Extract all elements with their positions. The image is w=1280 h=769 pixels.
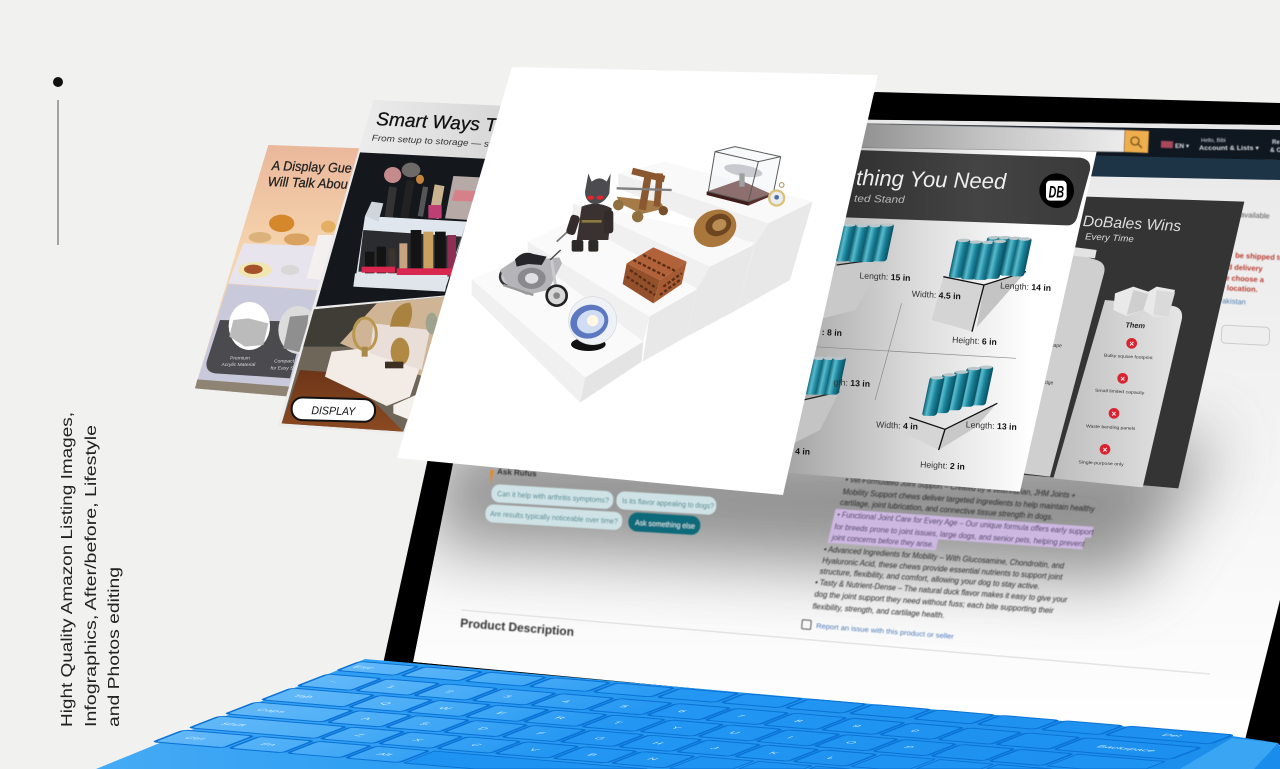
availability notes: d delivery (1227, 262, 1264, 273)
home row (225, 702, 877, 766)
heading: Smart Ways T (376, 108, 499, 135)
table with food (228, 215, 336, 290)
heading (1082, 213, 1182, 244)
brand badge: DB (1049, 182, 1064, 201)
item: armored knight figure (557, 173, 613, 252)
dark panel (1007, 196, 1244, 488)
availability notes: ery location. (1213, 283, 1258, 294)
ask rufus chips: Ask something else (635, 518, 695, 531)
availability notes: se choose a (1221, 273, 1265, 284)
them column (1053, 287, 1182, 487)
us product column: hape (1051, 343, 1062, 349)
lifestyle backdrop (195, 145, 363, 397)
card: DoBales Wins comparison (993, 196, 1244, 488)
lipsticks (365, 230, 456, 277)
vertical caption: Hight Quality Amazon Listing Images, (59, 412, 76, 727)
function and number rows (297, 661, 1233, 759)
keyboard deck (96, 659, 1280, 769)
screen shadow behind floating cards (430, 440, 1220, 580)
display pill label: DISPLAY (311, 405, 357, 418)
search bar (850, 123, 1125, 152)
feature captions: Compact (274, 359, 295, 365)
product bullet points: structure, flexibility, and comfort, allowing your dog to stay active. (819, 567, 1041, 591)
cosmetics photo (316, 152, 510, 307)
keys cut by the frame edge (404, 751, 1165, 769)
qwerty row (261, 688, 1073, 766)
card: Smart Ways To (277, 100, 523, 437)
lavender lower band (195, 284, 318, 397)
bottom-right can stand: Width: 4 in (876, 419, 918, 432)
report issue link: Report an issue with this product or seller (816, 623, 955, 641)
product cubes (1113, 287, 1175, 317)
feature icons (229, 302, 318, 354)
card surface (277, 100, 523, 437)
bottom-left can stand: gth: 13 in (833, 377, 870, 389)
them column: × (1129, 339, 1134, 348)
availability notes: Pakistan (1217, 296, 1246, 307)
item: glass galaxy globe (565, 297, 617, 351)
card: A Display Guests Will Talk About (195, 145, 363, 397)
top-right can stand: Height: 6 in (952, 335, 997, 347)
captions: Single-purpose only (1078, 459, 1125, 467)
item: ammonite fossil (687, 203, 743, 254)
captions: Bulky square footprint (1104, 353, 1154, 360)
laptop bezel (383, 92, 1280, 745)
feature captions: Acrylic Material (220, 362, 256, 368)
card header (807, 149, 1090, 225)
laptop screen (413, 115, 1280, 745)
laptop (383, 92, 1280, 745)
card header: thing You Need (856, 165, 1007, 194)
heading: DoBales Wins (1082, 213, 1182, 235)
section divider (461, 610, 1210, 674)
keyboard (96, 659, 1280, 769)
product bullet points: cartilage, joint lubrication, and connective tissue strength in dogs. (839, 498, 1054, 522)
top-left can stand: : 8 in (822, 327, 842, 338)
red x icons (1100, 338, 1137, 455)
search button (1124, 130, 1149, 153)
nav links: Account & Lists ▾ (1199, 145, 1260, 152)
top-right can stand: Width: 4.5 in (912, 289, 961, 301)
stair display riser (472, 147, 813, 403)
grid lines (813, 303, 1016, 400)
item: display case (707, 147, 781, 206)
product bullet points: • Vet-Formulated Joint Support – Created by a veterinarian, JHM Joints + (845, 475, 1077, 500)
top-right can stand: Length: 14 in (1000, 280, 1051, 293)
shift row (189, 716, 695, 768)
brand badge (1039, 173, 1074, 208)
brushes (384, 163, 444, 220)
heading (268, 158, 352, 192)
card header: ted Stand (854, 194, 905, 206)
bottom-right can stand (876, 365, 1017, 472)
captions: Waste bending panels (1086, 423, 1135, 431)
makeup palette (445, 176, 480, 220)
feature captions: for Easy St (270, 365, 295, 371)
third tier (572, 203, 755, 337)
bottom-right can stand: Height: 2 in (920, 459, 965, 472)
card: dimensions, Everything You Need (773, 147, 1097, 492)
us product column: dge (1045, 380, 1054, 386)
feature captions (220, 355, 295, 371)
vertical caption: and Photos editing (106, 567, 123, 727)
feature captions: Premium (230, 355, 250, 361)
them column: Them (1125, 320, 1146, 330)
nav links: Re (1272, 140, 1280, 146)
nav links (1161, 138, 1280, 154)
front tier (472, 255, 643, 403)
heading: Every Time (1085, 231, 1134, 244)
them column: × (1103, 445, 1108, 454)
product description heading: Product Description (460, 616, 575, 639)
bottom-right can stand: Length: 13 in (966, 419, 1017, 432)
ask rufus chips: Are results typically noticeable over time? (490, 509, 618, 526)
white pedestal (325, 347, 420, 406)
second tier (528, 220, 697, 362)
timeline marker dot and line (53, 77, 63, 245)
ground strip (195, 379, 290, 397)
product bullet points: • Functional Joint Care for Every Age – Our unique formula offers early support (836, 510, 1095, 537)
back tier (618, 162, 813, 310)
display pill label (291, 397, 375, 422)
hero card surface (397, 67, 878, 495)
product bullet points: flexibility, strength, and cartilage health. (812, 602, 946, 620)
hero card: white stair display (397, 67, 878, 495)
acrylic organizer (355, 216, 467, 285)
top-left can stand (817, 223, 911, 338)
brass ornaments (354, 303, 438, 368)
heading: Will Talk Abou (268, 174, 349, 192)
vertical caption (59, 412, 123, 727)
them column: × (1112, 409, 1117, 418)
top-left can stand: Length: 15 in (859, 270, 911, 283)
header band (360, 100, 523, 160)
report issue link (802, 620, 955, 641)
availability notes: available (1240, 210, 1270, 221)
ask rufus chips: Can it help with arthritis symptoms? (497, 489, 609, 505)
dark feature panel (206, 320, 305, 378)
captions: Small limited capacity (1095, 388, 1145, 395)
availability notes (1222, 212, 1280, 305)
bottom row (153, 730, 430, 763)
product bullet points: • Advanced Ingredients for Mobility – With Glucosamine, Chondroitin, and (823, 545, 1065, 570)
captions (1078, 353, 1154, 467)
item: wooden puzzle cube (623, 247, 687, 303)
nav links: Hello, Bibi (1201, 138, 1226, 144)
vertical caption: Infographics, After/before, Lifestyle (83, 425, 100, 727)
product bullet points: for breeds prone to joint issues, large dogs, and senior pets, helping prevent (833, 522, 1086, 549)
heading: A Display Gue (271, 158, 352, 176)
heading: From setup to storage — st (372, 133, 493, 149)
product bullet points: dog the joint support they need without fuss; each bite supporting their (813, 590, 1055, 615)
them column: × (1120, 374, 1125, 383)
bottom-left can stand (793, 357, 870, 457)
product bullet points: • Tasty & Nutrient-Dense – The natural duck flavor makes it easy to give your (814, 578, 1069, 604)
us product column (993, 247, 1105, 477)
product bullet points (812, 478, 1096, 618)
amazon nav bar (862, 123, 1280, 180)
display photo (282, 296, 450, 432)
item: pocket watch (768, 183, 785, 207)
card surface (773, 147, 1097, 492)
product bullet points: joint concerns before they arise. (830, 533, 935, 549)
bottom-left can stand: 4 in (795, 446, 810, 457)
product bullet points: Mobility Support chews deliver targeted ingredients to help maintain healthy (842, 487, 1097, 514)
nav links: EN ▾ (1175, 143, 1190, 150)
heading (372, 108, 499, 149)
product bullet points: Hyaluronic Acid, these chews provide essential nutrients to support joint (821, 556, 1064, 582)
ask rufus chips: Ask Rufus (497, 467, 537, 478)
ask rufus chips: Is its flavor appealing to dogs? (622, 496, 714, 511)
ask rufus chips (485, 467, 717, 535)
delivery box (1221, 325, 1270, 345)
item: silver motorcycle (500, 250, 567, 306)
item: catapult (613, 168, 672, 222)
top-right can stand (912, 236, 1051, 347)
